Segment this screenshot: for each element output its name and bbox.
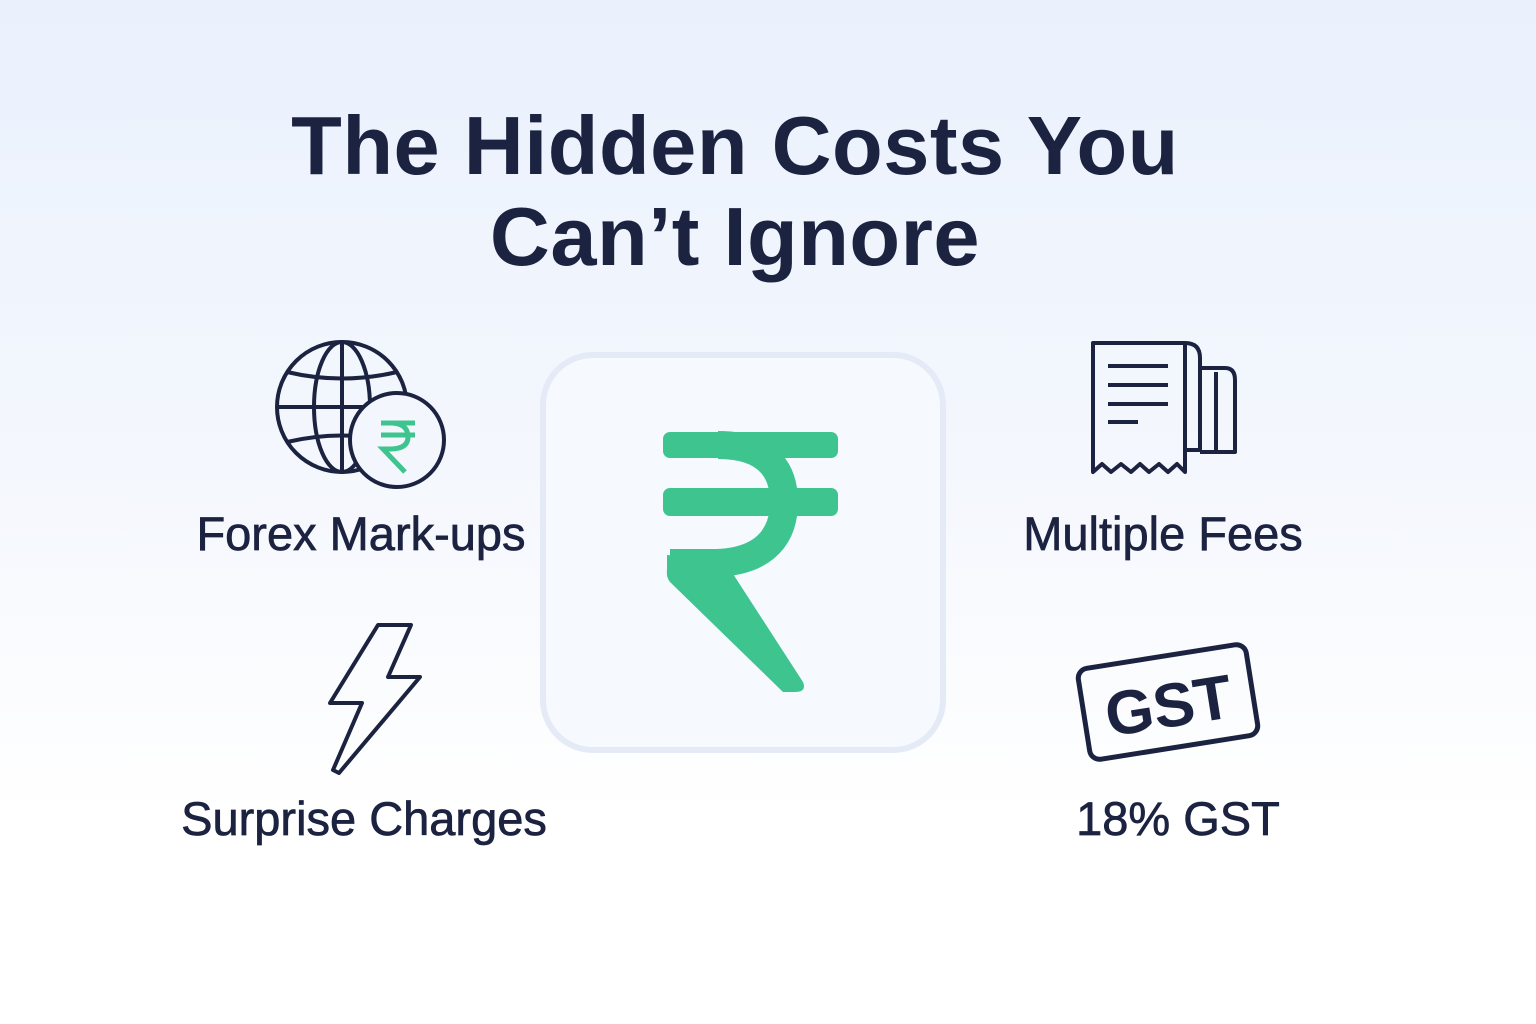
label: Surprise Charges: Surprise Charges — [181, 792, 547, 845]
label: 18% GST: 18% GST — [1076, 792, 1280, 845]
title: The Hidden Costs You — [291, 99, 1179, 192]
icon: lightning — [330, 625, 420, 773]
center panel: rupee card — [543, 355, 943, 750]
label: Multiple Fees: Multiple Fees — [1023, 507, 1303, 560]
icon: GST stamp: GST — [1100, 662, 1237, 750]
icon: receipt — [1093, 343, 1235, 472]
title: Can’t Ignore — [490, 190, 980, 283]
title — [291, 99, 1179, 283]
label: Forex Mark-ups: Forex Mark-ups — [196, 507, 526, 560]
icon: globe with rupee coin — [277, 342, 444, 487]
icon: GST stamp — [1077, 643, 1259, 761]
icon: rupee symbol — [663, 432, 838, 692]
